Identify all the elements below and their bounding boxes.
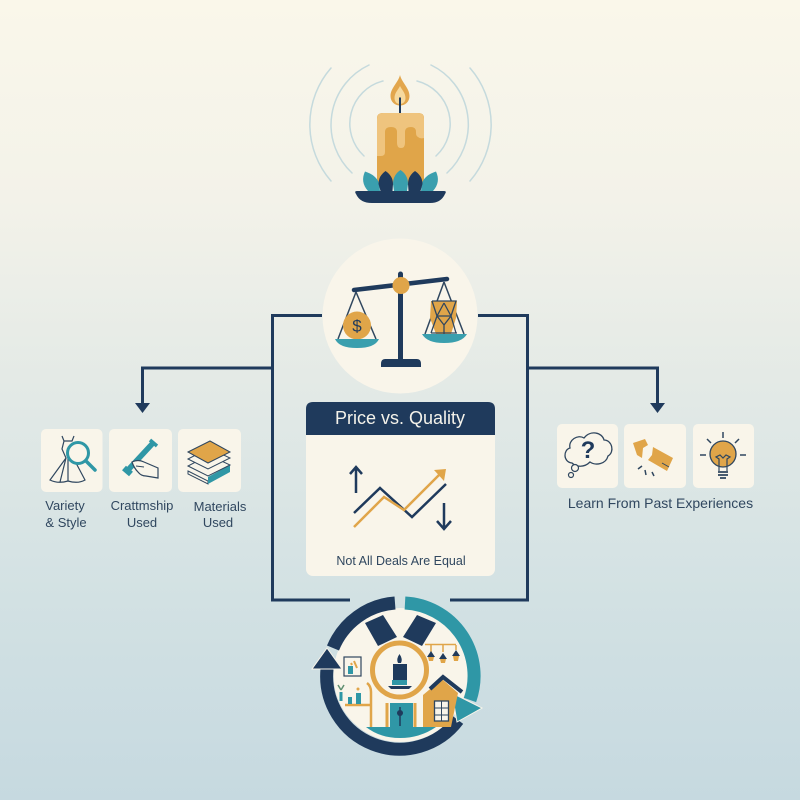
card: variety and style: Variety xyxy=(45,498,85,513)
plate xyxy=(355,191,446,203)
card: materials: Materials xyxy=(194,499,247,514)
doorway xyxy=(366,703,436,738)
shelf with vases xyxy=(338,683,371,727)
panel: price vs. quality xyxy=(306,402,495,576)
right group: learn from past experiences xyxy=(557,424,754,511)
left group: what to compare xyxy=(41,429,247,530)
house xyxy=(423,677,462,727)
card: question thought bubble xyxy=(557,424,618,488)
leaves xyxy=(363,172,380,191)
card: craftsmanship: Used xyxy=(127,515,157,530)
card: materials: Used xyxy=(203,515,233,530)
radiating waves xyxy=(310,65,491,181)
left pan with coin xyxy=(335,292,379,348)
panel header xyxy=(306,402,495,435)
flame xyxy=(390,75,410,106)
card: light bulb xyxy=(693,424,754,488)
card: variety and style xyxy=(41,429,102,530)
chart: crossing price and quality lines xyxy=(350,467,451,529)
beam xyxy=(354,279,447,290)
candle body xyxy=(377,113,424,185)
card: craftsmanship xyxy=(109,429,173,530)
banners xyxy=(365,615,397,646)
hanging lamps xyxy=(425,644,460,663)
card: broken object xyxy=(624,424,686,488)
connector lines and arrows xyxy=(135,316,665,600)
icon: home decor cycle xyxy=(312,603,482,749)
ring with candle xyxy=(372,643,426,697)
picture frame xyxy=(344,657,361,676)
right pan with crystal xyxy=(422,282,467,343)
cycle arrows xyxy=(327,603,474,749)
caption: Learn From Past Experiences xyxy=(568,495,753,511)
left pan with coin: $ xyxy=(352,316,362,336)
icon: balance scale comparing price and quality xyxy=(322,238,478,394)
post and base xyxy=(398,274,403,360)
icon: candle with radiating waves xyxy=(310,65,491,203)
card: materials xyxy=(178,429,247,530)
heading: Price vs. Quality xyxy=(335,408,465,428)
inner disc xyxy=(334,608,468,742)
card: question thought bubble: ? xyxy=(581,437,595,464)
card: craftsmanship: Crattmship xyxy=(111,498,173,513)
card: variety and style: & Style xyxy=(45,515,87,530)
caption: Not All Deals Are Equal xyxy=(336,554,466,568)
